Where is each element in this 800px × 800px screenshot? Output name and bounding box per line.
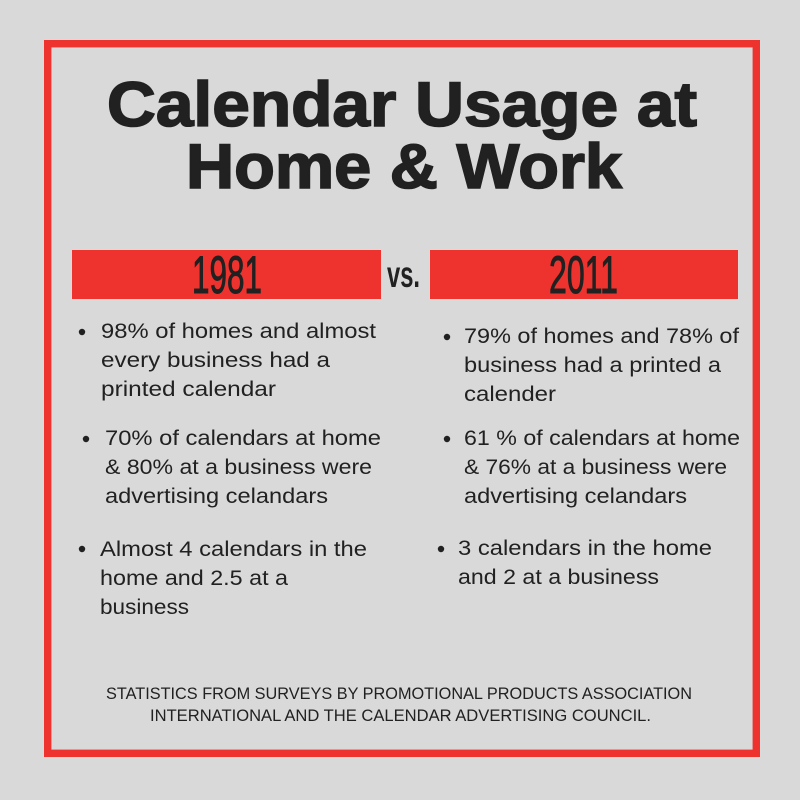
red frame border: [48, 44, 756, 753]
title: [107, 70, 697, 202]
list: 2011 statistics: [438, 325, 740, 589]
bullet: 1981 calendar counts: business: [100, 596, 189, 619]
bullet: 1981 advertising calendars: advertising celandars: [105, 485, 328, 508]
bullet: 1981 printed calendars: every business had a: [101, 349, 330, 372]
bullet: 2011 calendar counts: and 2 at a business: [458, 566, 659, 589]
bullet: 1981 calendar counts: Almost 4 calendars in the: [100, 538, 367, 561]
label: vs.: vs.: [387, 254, 420, 295]
title: Home & Work: [186, 132, 623, 202]
bullet: 2011 advertising calendars: & 76% at a business were: [464, 456, 727, 479]
bullet: 1981 printed calendars: 98% of homes and almost: [101, 320, 376, 343]
bullet: 2011 advertising calendars: 61 % of calendars at home: [464, 427, 740, 450]
bullet: 2011 printed calendars: [444, 325, 739, 406]
source note: [106, 685, 692, 725]
source note: STATISTICS FROM SURVEYS BY PROMOTIONAL PRODUCTS ASSOCIATION: [106, 685, 692, 703]
bullet: 2011 calendar counts: 3 calendars in the home: [458, 537, 712, 560]
bullet: 2011 advertising calendars: [444, 427, 740, 508]
title: Calendar Usage at: [107, 70, 697, 140]
banner: 2011: [430, 246, 738, 305]
bullet: 1981 advertising calendars: 70% of calendars at home: [105, 427, 381, 450]
bullet: 2011 printed calendars: 79% of homes and 78% of: [464, 325, 739, 348]
bullet: 2011 printed calendars: business had a printed a: [464, 354, 721, 377]
bullet: 2011 calendar counts: [438, 537, 712, 589]
bullet: 1981 printed calendars: [79, 320, 376, 401]
banner: 1981: 1981: [192, 246, 262, 305]
banner: 2011: 2011: [549, 246, 618, 305]
source note: INTERNATIONAL AND THE CALENDAR ADVERTISING COUNCIL.: [150, 707, 651, 725]
bullet: 1981 calendar counts: home and 2.5 at a: [100, 567, 288, 590]
bullet: 2011 advertising calendars: advertising celandars: [464, 485, 687, 508]
bullet: 1981 advertising calendars: [83, 427, 381, 508]
bullet: 1981 printed calendars: printed calendar: [101, 378, 276, 401]
banner: 1981: [72, 246, 381, 305]
list: 1981 statistics: [79, 320, 381, 619]
bullet: 1981 advertising calendars: & 80% at a business were: [105, 456, 372, 479]
bullet: 1981 calendar counts: [79, 538, 367, 619]
bullet: 2011 printed calendars: calender: [464, 383, 556, 406]
